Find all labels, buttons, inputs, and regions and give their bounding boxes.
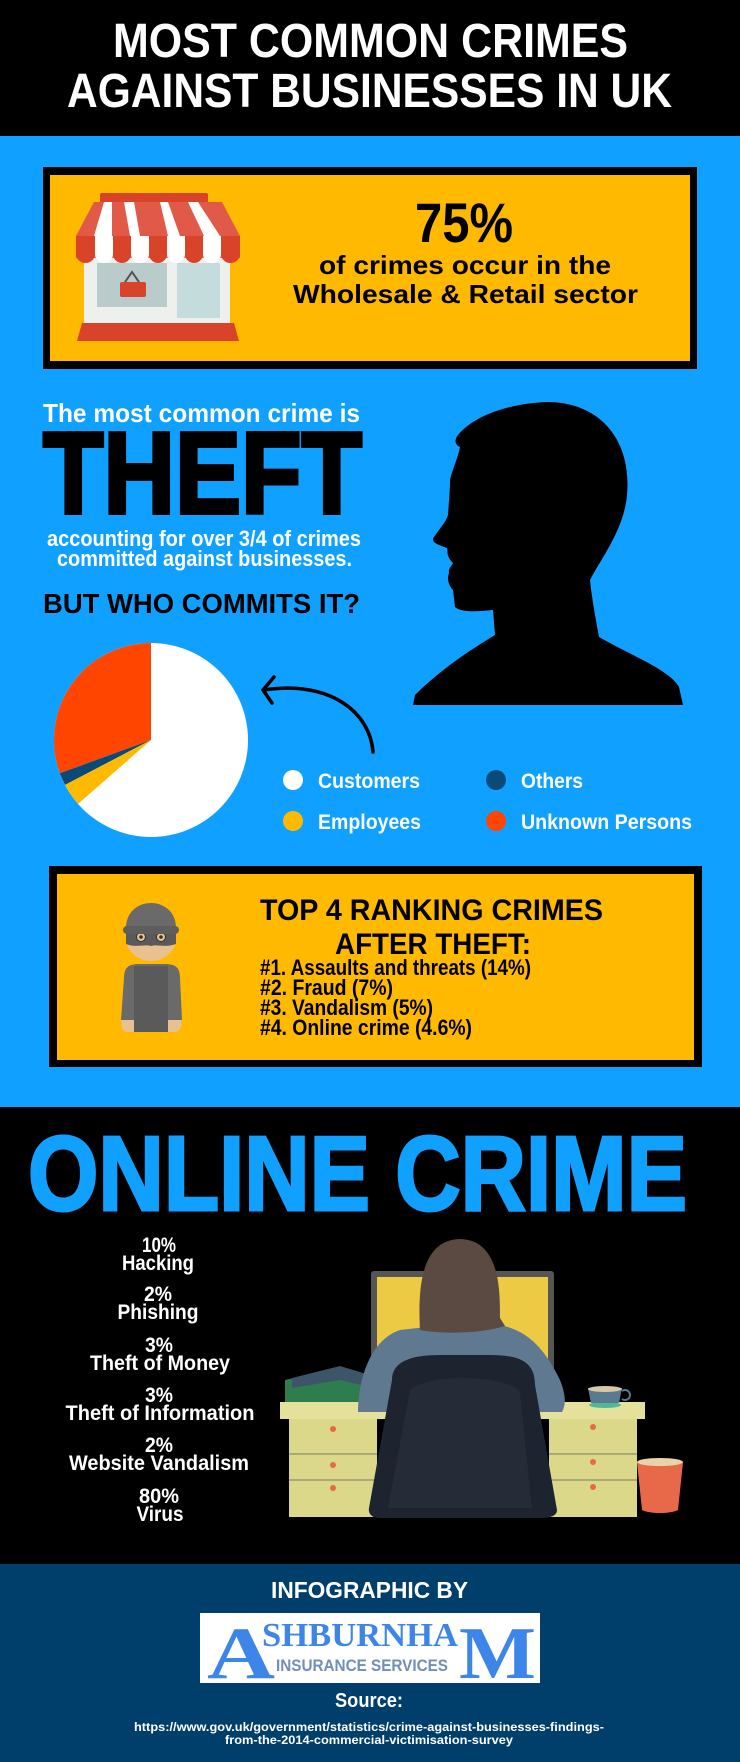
list: online crime stats: 80% (139, 1485, 179, 1508)
footer: source: https://www.gov.uk/government/statistics/crime-against-businesses-findings- (134, 1720, 604, 1734)
blue section background (0, 136, 740, 1107)
footer: infographic by: INFOGRAPHIC BY (271, 1577, 468, 1603)
text: ranking: #1. Assaults and threats (14%) (260, 955, 531, 980)
list: online crime stats: 3% (145, 1384, 173, 1407)
list: online crime stats (66, 1234, 254, 1526)
legend: Customers (318, 770, 420, 793)
logo: ashburnham: INSURANCE SERVICES (276, 1656, 448, 1675)
legend: Others (521, 770, 583, 793)
text block: theft: THEFT (43, 408, 362, 538)
heading: but who commits it: BUT WHO COMMITS IT? (43, 588, 360, 619)
list: online crime stats: Theft of Money (90, 1352, 230, 1375)
text block: theft (43, 398, 362, 571)
footer: source (134, 1690, 604, 1747)
title: AGAINST BUSINESSES IN UK (67, 65, 672, 118)
footer: source: from-the-2014-commercial-victimisation-survey (225, 1733, 513, 1747)
stat text: of crimes occur in the (319, 250, 611, 280)
title: MOST COMMON CRIMES (113, 15, 628, 68)
legend: Unknown Persons (521, 811, 692, 834)
footer: source: Source: (335, 1690, 403, 1712)
list: online crime stats: Virus (136, 1503, 184, 1526)
list: online crime stats: Hacking (122, 1252, 194, 1275)
text block: theft: accounting for over 3/4 of crimes (47, 526, 361, 551)
legend: Employees (318, 811, 421, 834)
stat text: 75% (415, 191, 513, 254)
text block: theft: committed against businesses. (57, 546, 352, 571)
logo: ashburnham: M (459, 1613, 536, 1695)
illustration: person at desk (280, 1239, 683, 1518)
text: ranking (260, 894, 603, 1040)
list: online crime stats: Phishing (118, 1301, 198, 1324)
text: ranking: TOP 4 RANKING CRIMES (260, 894, 603, 927)
list: online crime stats: 2% (144, 1283, 172, 1306)
logo: ashburnham (200, 1613, 540, 1695)
list: online crime stats: 3% (145, 1334, 173, 1357)
title (67, 15, 672, 118)
logo: ashburnham: SHBURNHA (262, 1617, 458, 1654)
list: online crime stats: Website Vandalism (69, 1452, 249, 1475)
list: online crime stats: 2% (145, 1434, 173, 1457)
panel: retail stat (43, 167, 697, 369)
footer background (0, 1564, 740, 1762)
list: online crime stats: 10% (142, 1234, 176, 1257)
logo: ashburnham: A (207, 1613, 275, 1695)
icon: store (76, 193, 240, 341)
stat text: Wholesale & Retail sector (293, 279, 638, 309)
text: ranking: AFTER THEFT: (335, 928, 531, 961)
text: ranking: #4. Online crime (4.6%) (260, 1015, 472, 1040)
legend (283, 770, 692, 834)
icon: burglar (121, 903, 182, 1032)
header band (0, 0, 740, 136)
icon: head silhouette (413, 402, 683, 705)
text: ranking: #2. Fraud (7%) (260, 975, 393, 1000)
text: ranking: #3. Vandalism (5%) (260, 995, 433, 1020)
stat text (293, 191, 638, 309)
online crime section background (0, 1107, 740, 1564)
text block: theft: The most common crime is (43, 398, 360, 428)
arrow (263, 677, 373, 752)
pie chart (54, 643, 248, 837)
list: online crime stats: Theft of Information (66, 1402, 254, 1425)
panel: top 4 crimes (49, 866, 702, 1067)
